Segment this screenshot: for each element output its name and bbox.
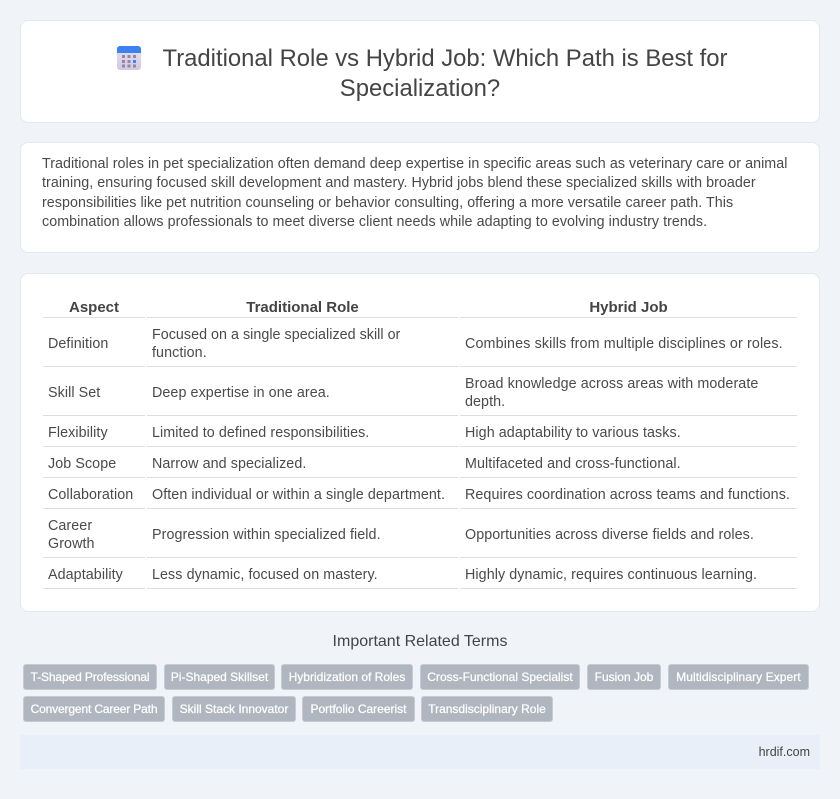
row: career growth: Growth <box>48 536 95 552</box>
footer bar <box>20 735 820 769</box>
title: Traditional Role vs Hybrid Job: Which Path is Best for <box>163 45 727 72</box>
chip: Portfolio Careerist <box>310 702 407 716</box>
chip: Multidisciplinary Expert <box>676 670 801 684</box>
row: flexibility: Flexibility <box>48 425 108 441</box>
row: skill set: Skill Set <box>48 385 100 401</box>
row: career growth: Career <box>48 518 92 534</box>
footer source: hrdif.com <box>759 745 810 759</box>
intro text <box>42 156 787 230</box>
chip <box>421 696 553 722</box>
table header: Hybrid Job <box>589 299 668 316</box>
chip <box>23 696 165 722</box>
row: adaptability <box>48 567 757 583</box>
chip <box>172 696 296 722</box>
intro text: responsibilities like pet nutrition counseling or behavior consulting, offering a more versatile career path. This <box>42 195 733 211</box>
row: definition <box>48 327 783 361</box>
intro text: Traditional roles in pet specialization often demand deep expertise in specific areas such as veterinary care or animal <box>42 156 787 172</box>
row: collaboration: Often individual or within a single department. <box>152 487 445 503</box>
intro text: training, ensuring focused skill development and mastery. Hybrid jobs blend these specialized skills with broader <box>42 175 756 191</box>
row: collaboration: Requires coordination across teams and functions. <box>465 487 790 503</box>
chip <box>420 664 580 690</box>
chip <box>281 664 413 690</box>
chip: Cross-Functional Specialist <box>427 670 573 684</box>
row: skill set: Broad knowledge across areas with moderate <box>465 376 758 392</box>
comparison table <box>43 299 797 589</box>
row: collaboration <box>48 487 790 503</box>
chip: T-Shaped Professional <box>31 670 149 684</box>
chip <box>23 664 157 690</box>
chip <box>587 664 661 690</box>
chip: Transdisciplinary Role <box>428 702 546 716</box>
row: skill set: depth. <box>465 394 505 410</box>
chip <box>164 664 275 690</box>
row: job scope: Multifaceted and cross-functional. <box>465 456 681 472</box>
chip <box>668 664 809 690</box>
row: skill set <box>48 376 758 410</box>
table card <box>20 273 820 612</box>
header card <box>20 20 820 123</box>
row: career growth: Opportunities across diverse fields and roles. <box>465 527 754 543</box>
chip: Pi-Shaped Skillset <box>171 670 268 684</box>
row: job scope <box>48 456 681 472</box>
related terms heading: Important Related Terms <box>333 633 507 650</box>
row: flexibility: High adaptability to various tasks. <box>465 425 681 441</box>
row: flexibility: Limited to defined responsibilities. <box>152 425 369 441</box>
chip: Convergent Career Path <box>31 702 157 716</box>
row: job scope: Job Scope <box>48 456 116 472</box>
row: definition: Combines skills from multiple disciplines or roles. <box>465 336 783 352</box>
row: career growth <box>48 518 754 552</box>
table header: Traditional Role <box>246 299 359 316</box>
title <box>163 45 728 102</box>
intro card <box>20 142 820 253</box>
row: definition: Focused on a single specialized skill or <box>152 327 400 343</box>
icon: calendar <box>117 46 141 70</box>
row: definition: function. <box>152 345 207 361</box>
row: adaptability: Highly dynamic, requires continuous learning. <box>465 567 757 583</box>
row: job scope: Narrow and specialized. <box>152 456 306 472</box>
row: collaboration: Collaboration <box>48 487 133 503</box>
chip: Hybridization of Roles <box>289 670 405 684</box>
row: definition: Definition <box>48 336 108 352</box>
table header <box>69 299 668 316</box>
title: Specialization? <box>340 75 500 102</box>
row: skill set: Deep expertise in one area. <box>152 385 330 401</box>
related terms chips <box>23 664 809 722</box>
chip: Fusion Job <box>595 670 653 684</box>
row: adaptability: Adaptability <box>48 567 123 583</box>
chip: Skill Stack Innovator <box>180 702 288 716</box>
intro text: combination allows professionals to meet diverse client needs while adapting to evolving industry trends. <box>42 214 707 230</box>
chip <box>302 696 415 722</box>
row: adaptability: Less dynamic, focused on mastery. <box>152 567 378 583</box>
row: flexibility <box>48 425 681 441</box>
table header: Aspect <box>69 299 119 316</box>
row: career growth: Progression within specialized field. <box>152 527 381 543</box>
